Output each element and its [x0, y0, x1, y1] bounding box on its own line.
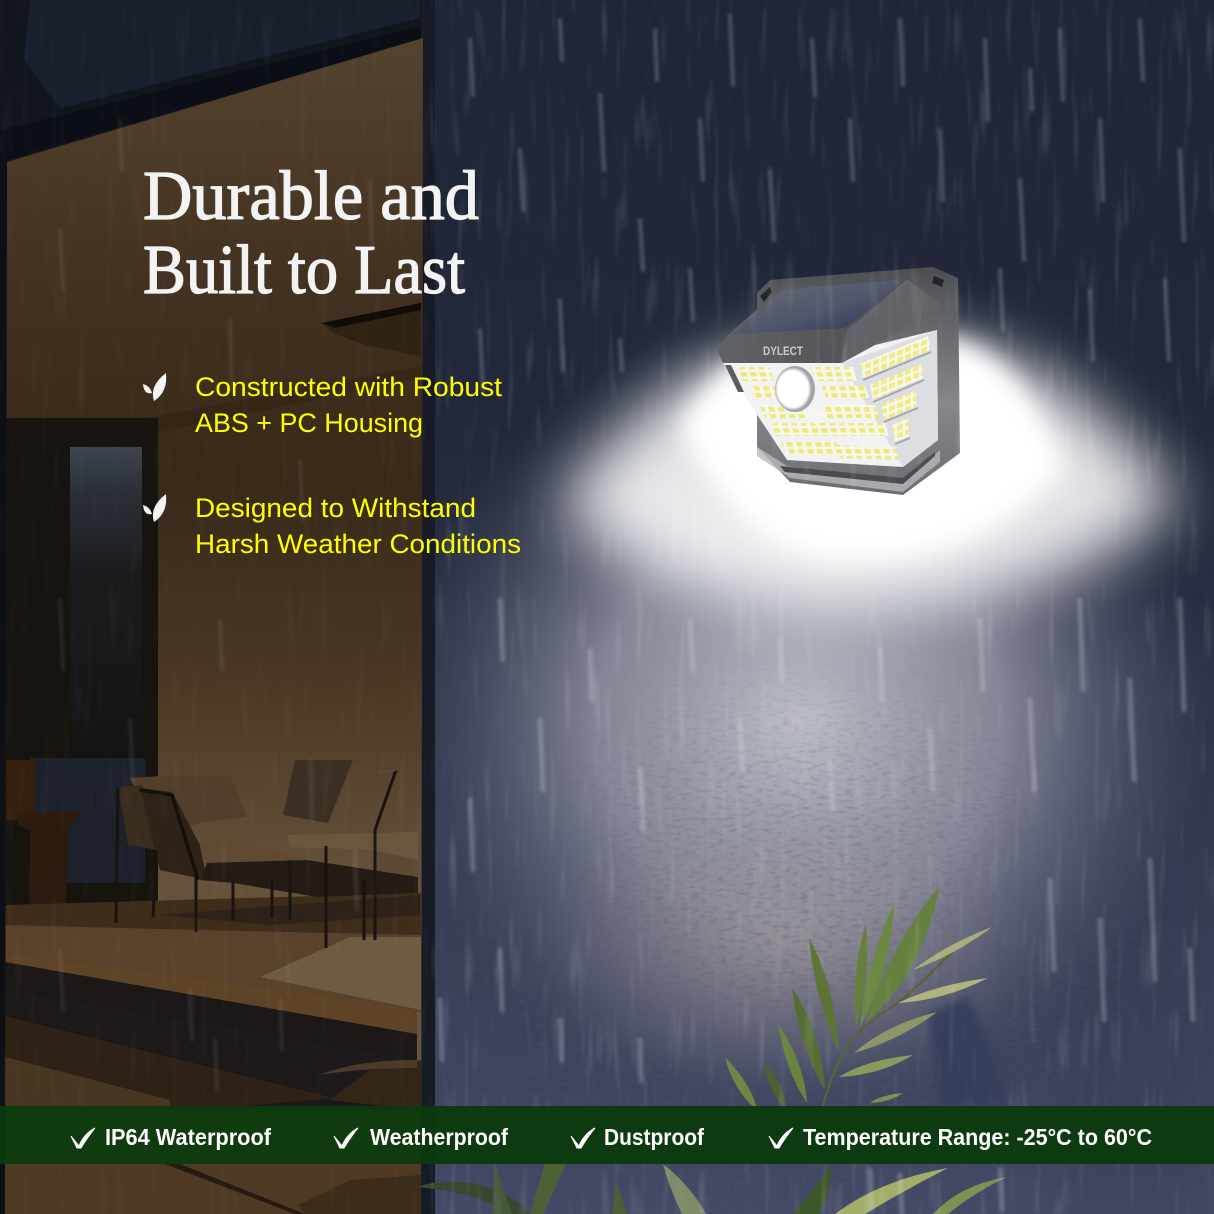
front face with LEDs [723, 330, 938, 467]
plant stem [823, 953, 952, 1106]
bottom ridges [757, 447, 940, 492]
plant [415, 887, 1007, 1214]
strip shadows [863, 352, 931, 444]
panel: interior room seen through glass [0, 30, 425, 1214]
plant shadow on wall [929, 997, 1007, 1106]
seats [223, 827, 327, 840]
ceiling slot [322, 310, 421, 356]
icon: leaf [143, 373, 166, 401]
feature: Temperature Range: Temperature Range: -25°C to 60°C [803, 1124, 1152, 1150]
bottom feature band [0, 1106, 1214, 1164]
chair legs and frames [116, 770, 396, 948]
side edge [725, 365, 744, 392]
motion sensor [775, 366, 815, 412]
background: rainy wall [435, 0, 1214, 1214]
leaves below the band [792, 1164, 831, 1214]
window glass [70, 447, 142, 702]
bullet text: Designed to Withstand [195, 493, 476, 523]
feature: IP64 Waterproof: IP64 Waterproof [105, 1124, 271, 1150]
icon: leaf [143, 494, 166, 522]
check icon [71, 1128, 95, 1148]
bullet text: ABS + PC Housing [195, 408, 423, 438]
leaves [809, 938, 839, 1053]
armchair cushion back [130, 775, 247, 838]
bullet text: Harsh Weather Conditions [195, 529, 521, 559]
LED strips left [738, 367, 774, 381]
product: solar wall lamp [717, 267, 960, 495]
LED strips right [860, 336, 930, 378]
furniture: patio chairs and table [116, 760, 420, 948]
under seat shadows [200, 860, 418, 897]
check icon [334, 1128, 358, 1148]
rear chair back [283, 760, 353, 823]
bullet: harsh weather [143, 493, 521, 559]
mounting holes [760, 276, 944, 302]
brand label: DYLECT [763, 344, 804, 358]
upper left roof structure [0, 0, 435, 1214]
check icon [571, 1128, 595, 1148]
feature: Dustproof: Dustproof [604, 1124, 704, 1150]
ceiling line [236, 366, 421, 402]
check icon [769, 1128, 793, 1148]
light beam from lamp [560, 337, 1180, 610]
title: Built to Last [143, 232, 466, 309]
title [143, 158, 479, 309]
leaf reflection [320, 1060, 417, 1075]
side table [18, 812, 82, 904]
feature: Weatherproof: Weatherproof [370, 1124, 508, 1150]
dark doorway left [5, 418, 158, 918]
title: Durable and [143, 158, 479, 235]
solar panel hood [717, 278, 943, 363]
floor [5, 893, 421, 1012]
lamp back plate [757, 267, 960, 495]
bullet text: Constructed with Robust [195, 372, 503, 402]
bullet text [195, 372, 503, 438]
bullet text [195, 493, 521, 559]
floor shadow [158, 895, 420, 925]
bullet: robust housing [143, 372, 503, 438]
